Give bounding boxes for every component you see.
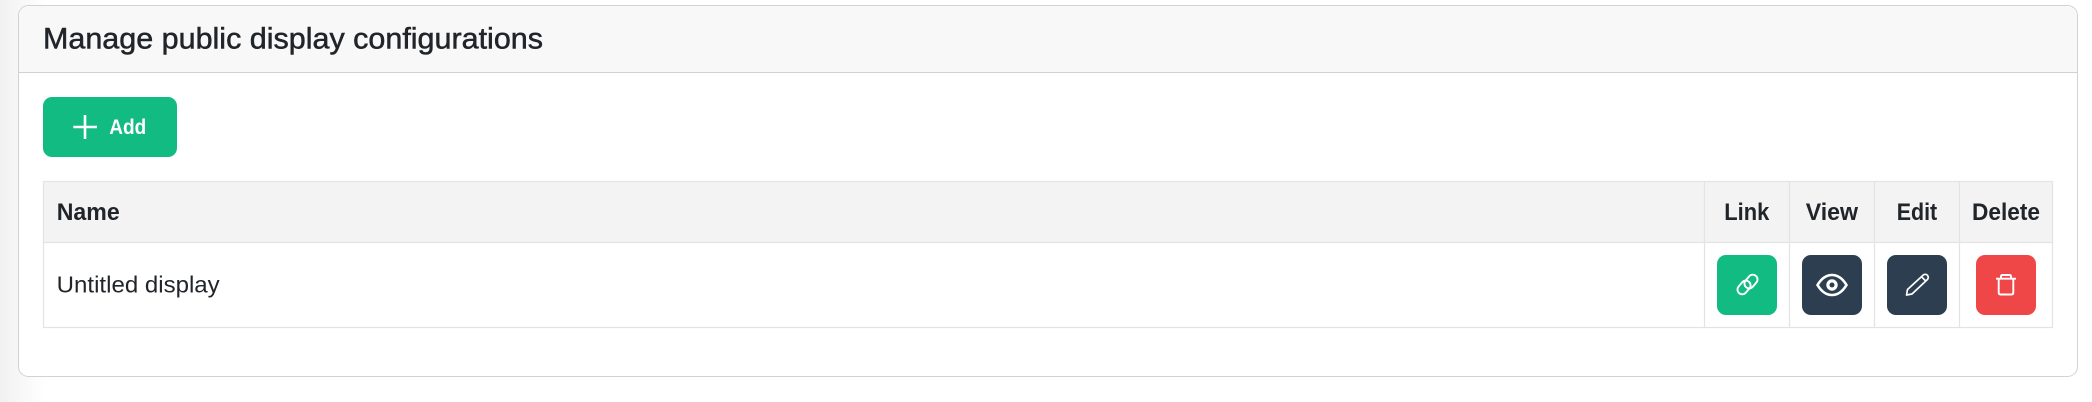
- table: [44, 182, 2052, 328]
- add label: Add: [109, 116, 146, 139]
- icon: eye: [1818, 275, 1846, 295]
- column heading: link: Link: [1724, 199, 1770, 226]
- icon: pencil: [1906, 274, 1928, 295]
- delete button: [1976, 255, 2036, 315]
- add button: [43, 97, 177, 157]
- column heading: edit: Edit: [1897, 199, 1937, 226]
- edit button: [1887, 255, 1947, 315]
- title: Manage public display configurations: [43, 22, 543, 56]
- column heading: name: Name: [57, 199, 120, 226]
- icon: trash: [1996, 275, 2016, 294]
- column heading: delete: Delete: [1972, 199, 2040, 226]
- column heading: view: View: [1806, 199, 1859, 226]
- icon: link: [1736, 272, 1759, 297]
- icon: plus: [73, 115, 97, 139]
- link button: [1717, 255, 1777, 315]
- view button: [1802, 255, 1862, 315]
- card header bar: [19, 6, 2077, 72]
- row name: untitled display: Untitled display: [57, 272, 220, 298]
